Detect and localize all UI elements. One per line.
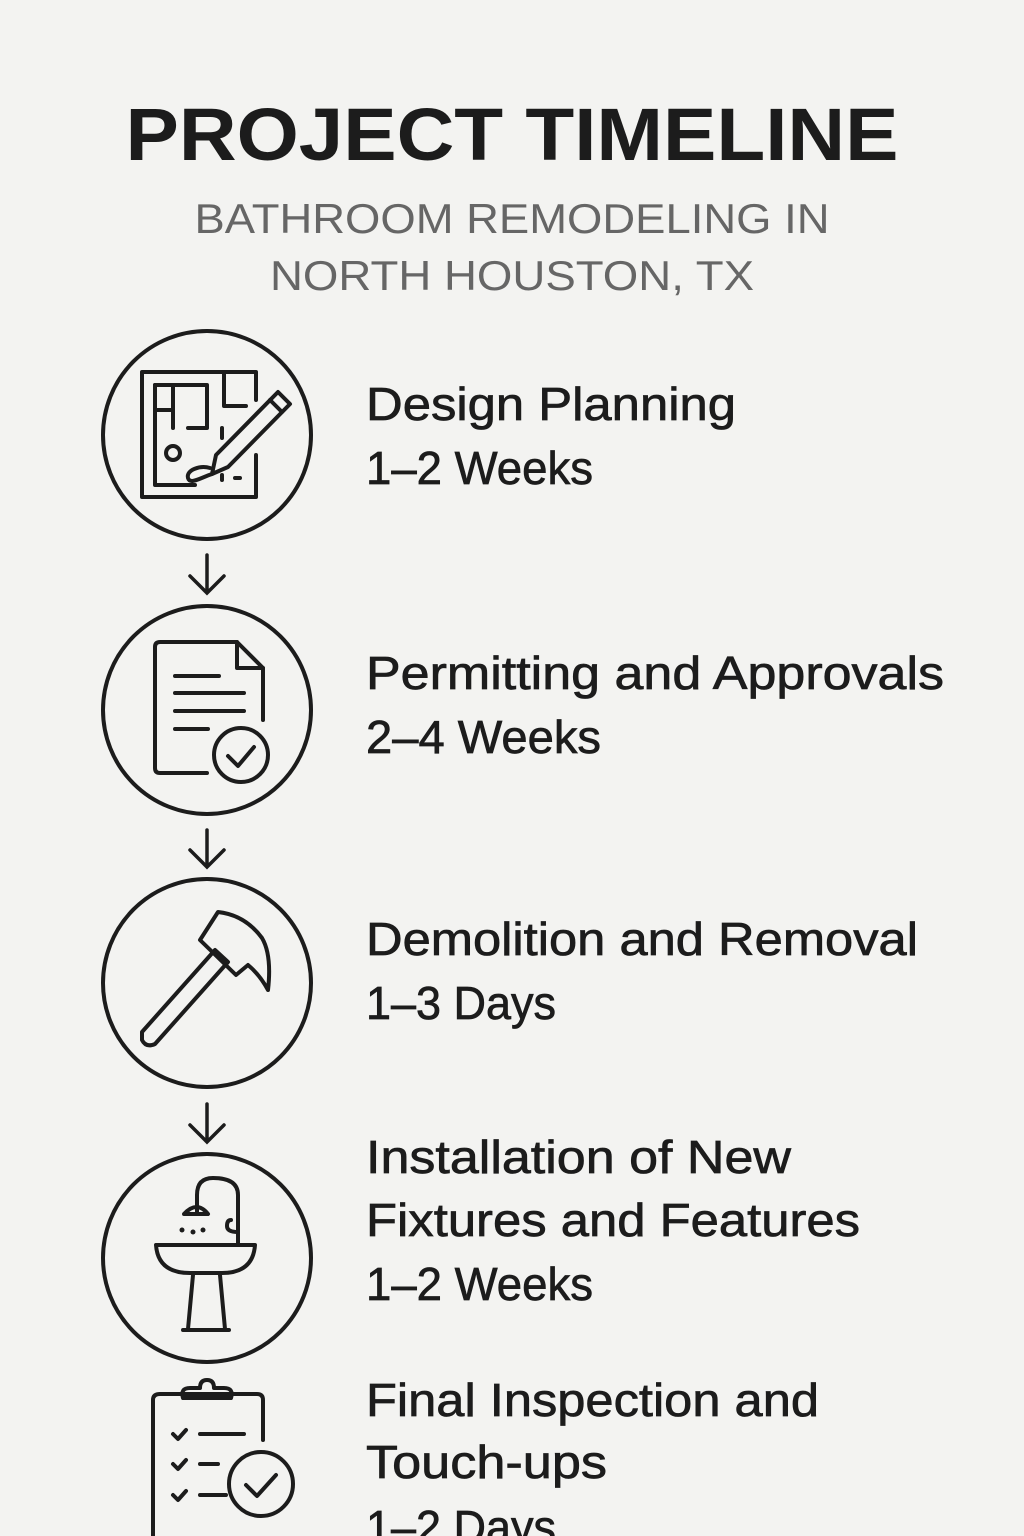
step 4: installation: Fixtures and Features [366, 1194, 860, 1246]
step 5: final inspection [153, 1374, 819, 1536]
arrow 2 [190, 830, 224, 867]
heading: Demolition and Removal [366, 913, 918, 965]
duration: 1–3 Days [366, 977, 556, 1029]
icon: clipboard checklist [153, 1380, 293, 1536]
subtitle: NORTH HOUSTON, TX [270, 252, 754, 299]
subtitle: BATHROOM REMODELING IN [194, 195, 830, 242]
heading: Installation of New [366, 1131, 792, 1183]
heading: Permitting and Approvals [366, 647, 944, 699]
icon: blueprint and pencil [103, 331, 311, 539]
arrow 3 [190, 1104, 224, 1142]
icon: hammer [103, 879, 311, 1087]
duration: 2–4 Weeks [366, 711, 601, 763]
title: PROJECT TIMELINE [126, 93, 899, 176]
icon: sink and shower [103, 1154, 311, 1362]
heading: Design Planning [366, 378, 736, 430]
duration: 1–2 Weeks [366, 1258, 593, 1310]
step 1: design planning [103, 331, 736, 539]
step 5: final inspection: Touch-ups [366, 1436, 607, 1488]
step 3: demolition [103, 879, 918, 1087]
icon: document with check [103, 606, 311, 814]
duration: 1–2 Weeks [366, 442, 593, 494]
arrow 1 [190, 555, 224, 593]
step 4: installation [103, 1131, 860, 1362]
heading: Final Inspection and [366, 1374, 819, 1426]
step 2: permitting [103, 606, 944, 814]
subtitle [194, 195, 830, 299]
